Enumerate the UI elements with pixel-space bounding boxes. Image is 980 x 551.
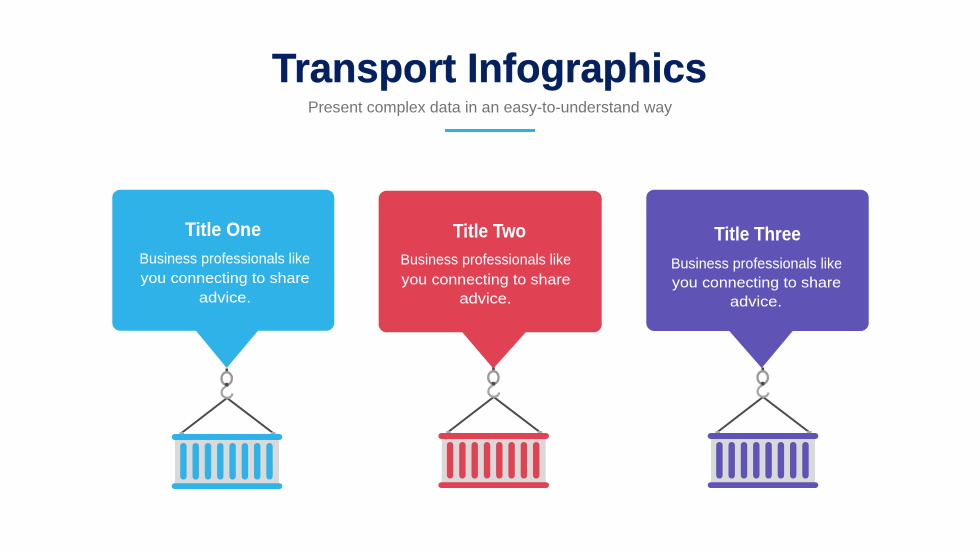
body text: you connecting to share bbox=[140, 271, 310, 287]
body text bbox=[400, 252, 571, 307]
heading: Title Two bbox=[453, 221, 526, 242]
body text bbox=[671, 255, 842, 311]
subtitle: Present complex data in an easy-to-understand way bbox=[308, 100, 672, 116]
body text: advice. bbox=[199, 290, 251, 306]
heading: Title Three bbox=[714, 225, 801, 246]
panel: title two bbox=[379, 191, 602, 368]
panel: title one bbox=[112, 190, 334, 368]
body text: Business professionals like bbox=[140, 250, 310, 268]
body text: advice. bbox=[460, 291, 512, 307]
speech bubble bbox=[379, 191, 602, 368]
title underline accent bbox=[445, 129, 535, 132]
panel: title three bbox=[646, 190, 869, 368]
icon: hanging container one bbox=[172, 368, 282, 489]
body text: Business professionals like bbox=[671, 255, 842, 272]
speech bubble bbox=[646, 190, 869, 368]
title: Transport Infographics bbox=[272, 45, 707, 91]
body text: you connecting to share bbox=[402, 272, 570, 288]
icon: hanging container two bbox=[438, 368, 549, 488]
speech bubble bbox=[112, 190, 334, 368]
heading: Title One bbox=[185, 220, 261, 241]
body text: advice. bbox=[730, 295, 782, 311]
body text bbox=[140, 250, 310, 306]
icon: hanging container three bbox=[708, 368, 818, 488]
body text: you connecting to share bbox=[672, 276, 841, 292]
body text: Business professionals like bbox=[400, 252, 571, 268]
